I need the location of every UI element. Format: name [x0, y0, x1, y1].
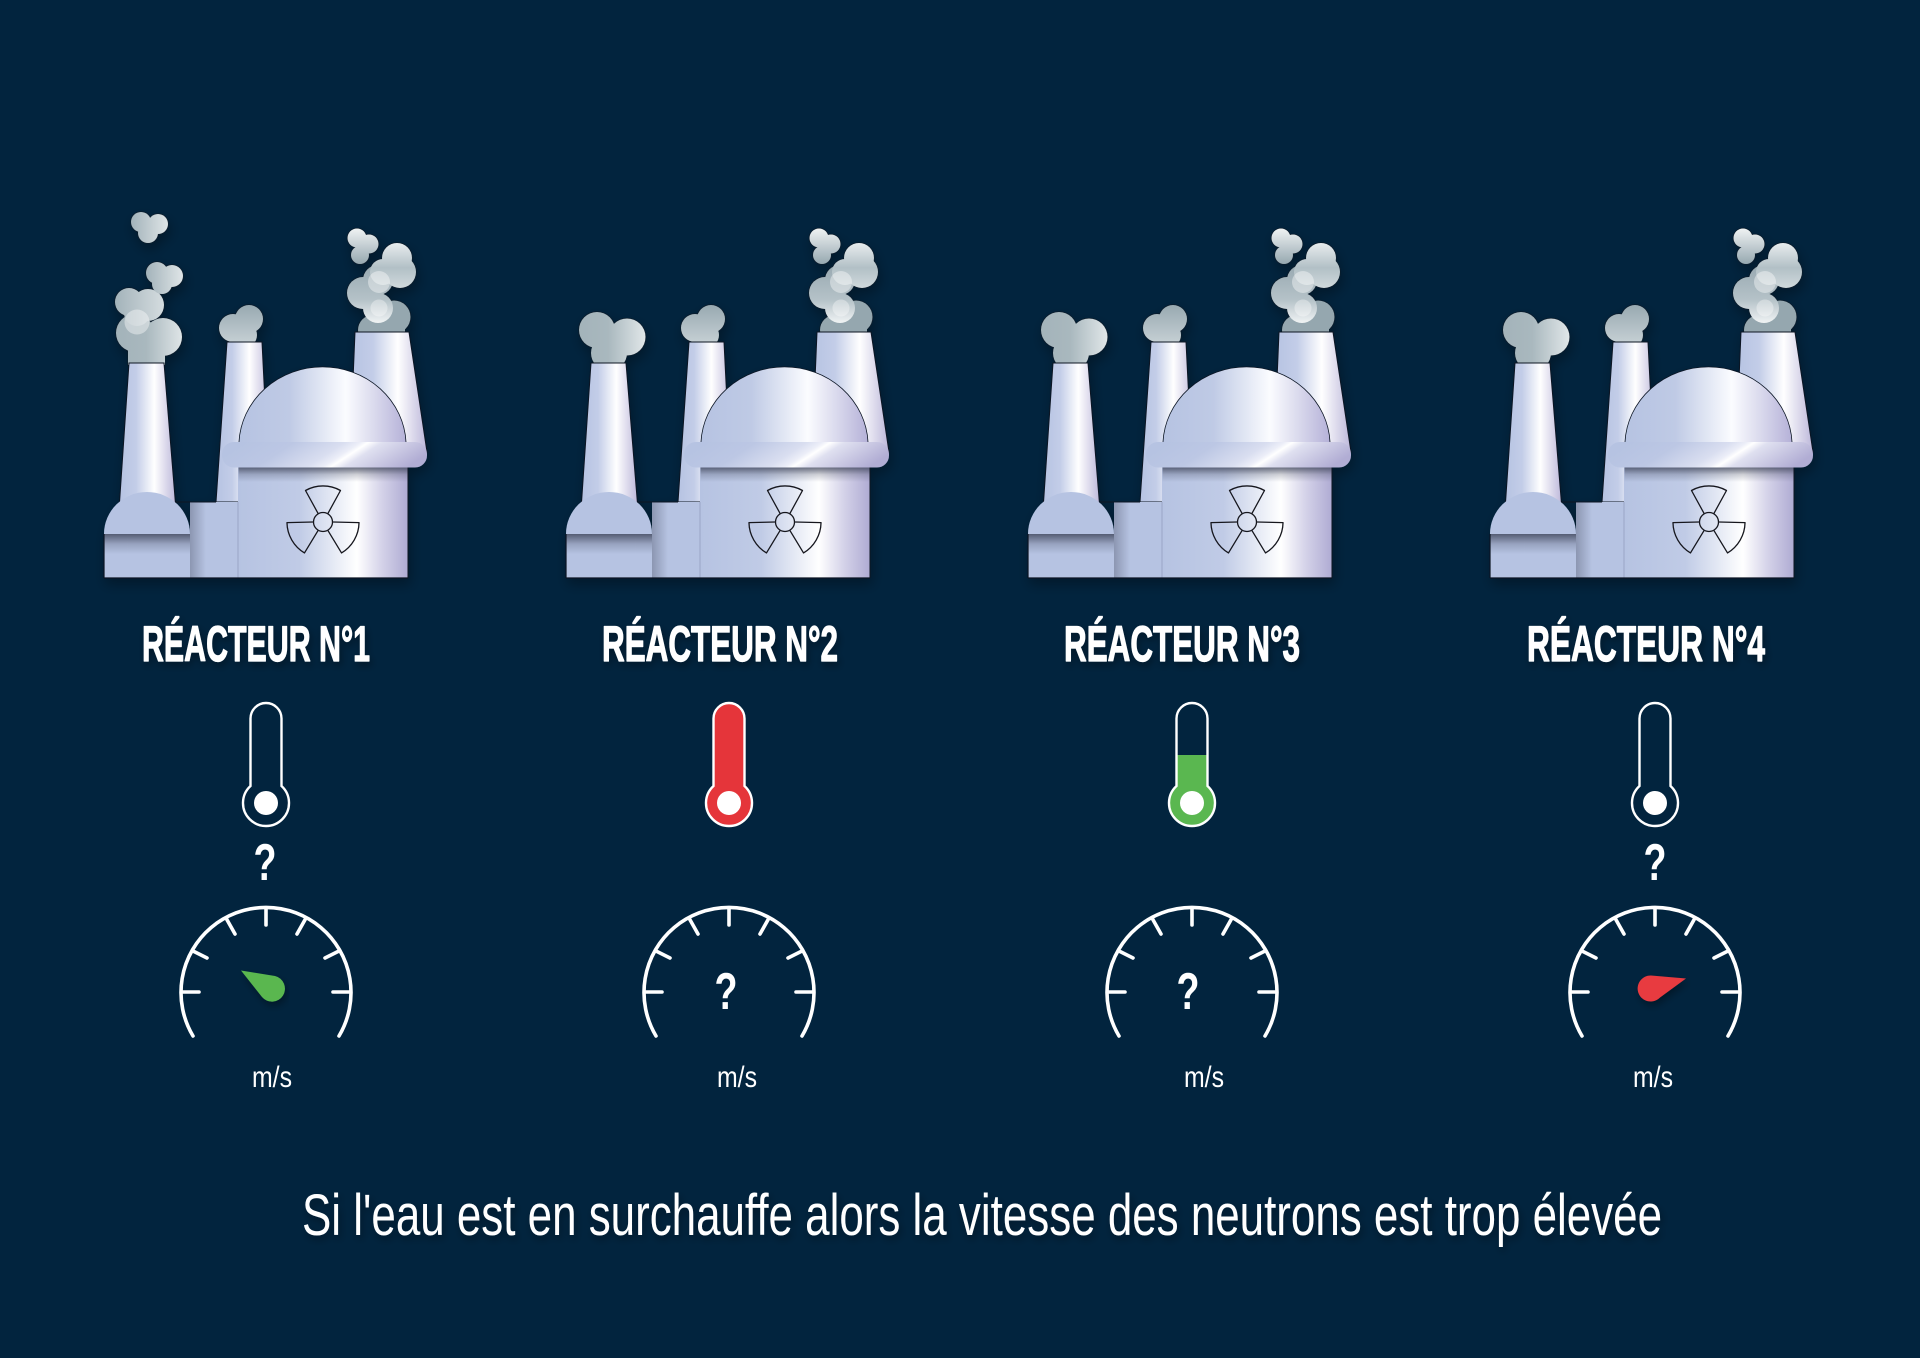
panel: reactor 3	[1028, 228, 1351, 1094]
gauge: unknown speed	[644, 907, 814, 1036]
unit label: m/s	[1633, 1061, 1673, 1094]
unit label: m/s	[252, 1061, 292, 1094]
smoke: other chimneys	[681, 228, 878, 348]
thermometer: empty	[243, 703, 289, 826]
thermometer: red full	[706, 703, 752, 826]
heading: reactor 3: RÉACTEUR N°3	[1064, 616, 1300, 672]
heading: reactor 1: RÉACTEUR N°1	[142, 616, 370, 672]
unit label: m/s	[1184, 1061, 1224, 1094]
gauge: unknown speed	[1107, 907, 1277, 1036]
question mark: temperature: ?	[254, 834, 276, 892]
smoke: other chimneys	[1143, 228, 1340, 348]
building	[566, 332, 889, 578]
building	[104, 332, 427, 578]
smoke: left chimney	[1041, 312, 1108, 371]
question mark: speed: ?	[1176, 963, 1200, 1021]
gauge: high speed	[1570, 907, 1740, 1036]
illustration: power plant 2	[566, 228, 889, 578]
smoke: middle and right chimneys	[219, 228, 416, 348]
illustration: power plant 3	[1028, 228, 1351, 578]
building	[1028, 332, 1351, 578]
needle: green	[241, 970, 285, 1002]
unit label: m/s	[717, 1061, 757, 1094]
needle: red	[1638, 975, 1686, 1001]
panel: reactor 1	[104, 212, 427, 1094]
panel: reactor 4	[1490, 228, 1813, 1094]
heading: reactor 4: RÉACTEUR N°4	[1527, 616, 1765, 672]
panel: reactor 2	[566, 228, 889, 1094]
question mark: temperature: ?	[1644, 834, 1666, 892]
smoke: left chimney	[1503, 312, 1570, 371]
building	[1490, 332, 1813, 578]
question mark: speed: ?	[714, 963, 738, 1021]
smoke: left chimney	[115, 212, 183, 368]
smoke: left chimney	[579, 312, 646, 371]
illustration: power plant 4	[1490, 228, 1813, 578]
thermometer: green half	[1169, 703, 1215, 826]
illustration: power plant 1	[104, 212, 427, 578]
gauge: low speed	[181, 907, 351, 1036]
smoke: other chimneys	[1605, 228, 1802, 348]
thermometer: empty	[1632, 703, 1678, 826]
heading: reactor 2: RÉACTEUR N°2	[602, 616, 838, 672]
